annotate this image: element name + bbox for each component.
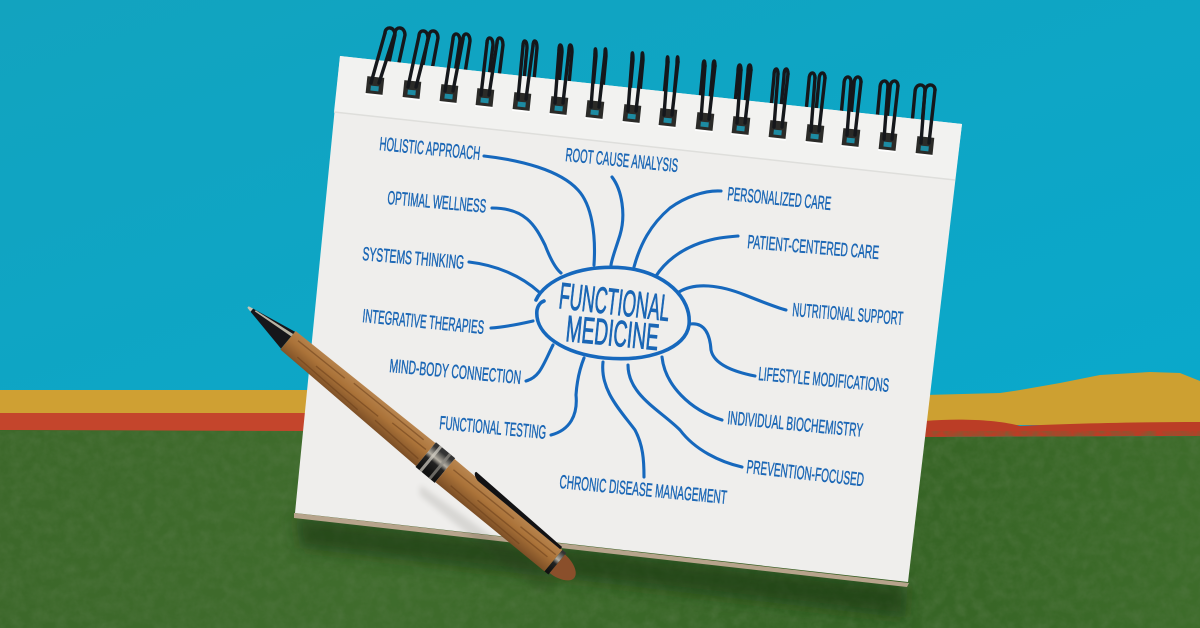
- branch labels: MIND-BODY CONNECTION: [389, 356, 522, 389]
- notebook header strip: [334, 56, 962, 180]
- pen lower barrel: [435, 459, 563, 572]
- mind map: [362, 134, 904, 509]
- branch labels: INTEGRATIVE THERAPIES: [362, 306, 485, 339]
- notebook page: [295, 56, 962, 582]
- branch labels: INDIVIDUAL BIOCHEMISTRY: [727, 408, 864, 442]
- branch labels: OPTIMAL WELLNESS: [387, 188, 487, 218]
- spiral binding: holes and front strands: [365, 33, 935, 156]
- central ellipse: FUNCTIONAL: [557, 275, 672, 329]
- branch labels: HOLISTIC APPROACH: [379, 134, 481, 165]
- branch labels: PREVENTION-FOCUSED: [745, 457, 865, 491]
- pen end collar: [545, 550, 566, 575]
- background: left paper stripes: [0, 390, 310, 431]
- branch labels: PATIENT-CENTERED CARE: [747, 232, 880, 264]
- pen tip: [247, 305, 253, 312]
- pen shadow: [420, 485, 560, 592]
- pen center ring: [416, 442, 455, 483]
- branch labels: SYSTEMS THINKING: [362, 244, 465, 274]
- spiral binding: back strands behind the page: [385, 28, 935, 124]
- center title: [557, 275, 672, 358]
- branch labels: CHRONIC DISEASE MANAGEMENT: [559, 472, 728, 509]
- branch labels: NUTRITIONAL SUPPORT: [792, 300, 904, 330]
- branch labels: LIFESTYLE MODIFICATIONS: [758, 364, 890, 397]
- pen clip: [472, 472, 564, 549]
- notebook shadow: [295, 516, 908, 618]
- notebook back edge: [294, 513, 909, 587]
- branches: [469, 156, 786, 477]
- pen nose cone: [245, 302, 295, 349]
- background: blue paper: [0, 0, 1200, 420]
- pen end cap: [550, 555, 582, 587]
- background: green paper: [0, 430, 1200, 628]
- pen upper barrel: [278, 329, 435, 466]
- branch labels: FUNCTIONAL TESTING: [439, 413, 547, 444]
- branch labels: [362, 134, 904, 509]
- background: right paper stripes: [925, 372, 1200, 437]
- pen: [238, 292, 586, 590]
- center title: MEDICINE: [564, 308, 661, 358]
- branch labels: ROOT CAUSE ANALYSIS: [565, 145, 679, 177]
- notebook: [294, 56, 962, 587]
- branch labels: PERSONALIZED CARE: [727, 184, 832, 215]
- central ellipse: [536, 267, 689, 359]
